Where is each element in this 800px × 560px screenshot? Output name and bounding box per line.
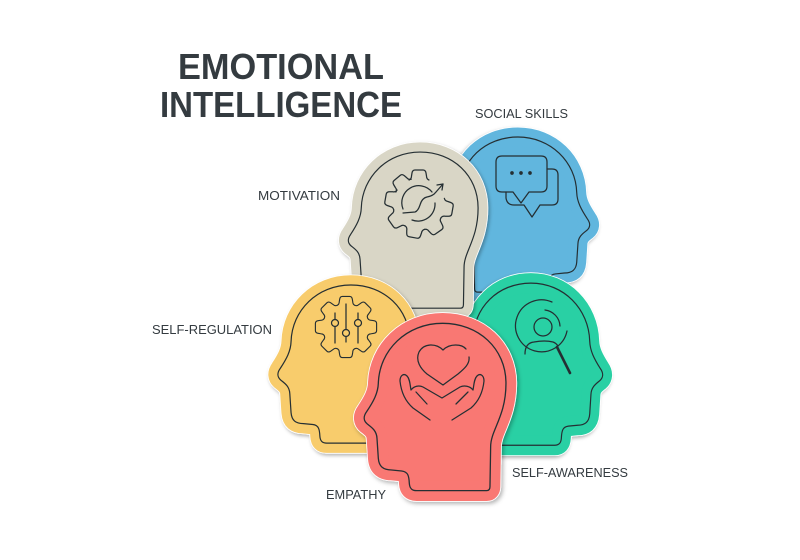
- title: INTELLIGENCE: [160, 84, 402, 125]
- head: self-awareness (green): [473, 283, 603, 445]
- icon: heart in hands: [400, 345, 484, 420]
- title: [160, 46, 402, 125]
- head: self-regulation (yellow): [278, 285, 410, 443]
- head: social skills (blue): [460, 137, 590, 292]
- label: social skills: SOCIAL SKILLS: [475, 106, 568, 121]
- label: empathy: EMPATHY: [326, 487, 386, 502]
- label: self-regulation: SELF-REGULATION: [152, 322, 272, 337]
- head: motivation (beige): [348, 152, 478, 308]
- head: empathy (red): [364, 323, 506, 491]
- icon: magnifier with person: [516, 300, 570, 373]
- icon: gear with arrow: [384, 170, 454, 239]
- icon: gear with sliders: [315, 296, 377, 358]
- icon: speech bubbles: [496, 156, 558, 217]
- label: motivation: MOTIVATION: [258, 188, 340, 203]
- label: self-awareness: SELF-AWARENESS: [512, 465, 628, 480]
- title: EMOTIONAL: [178, 46, 384, 87]
